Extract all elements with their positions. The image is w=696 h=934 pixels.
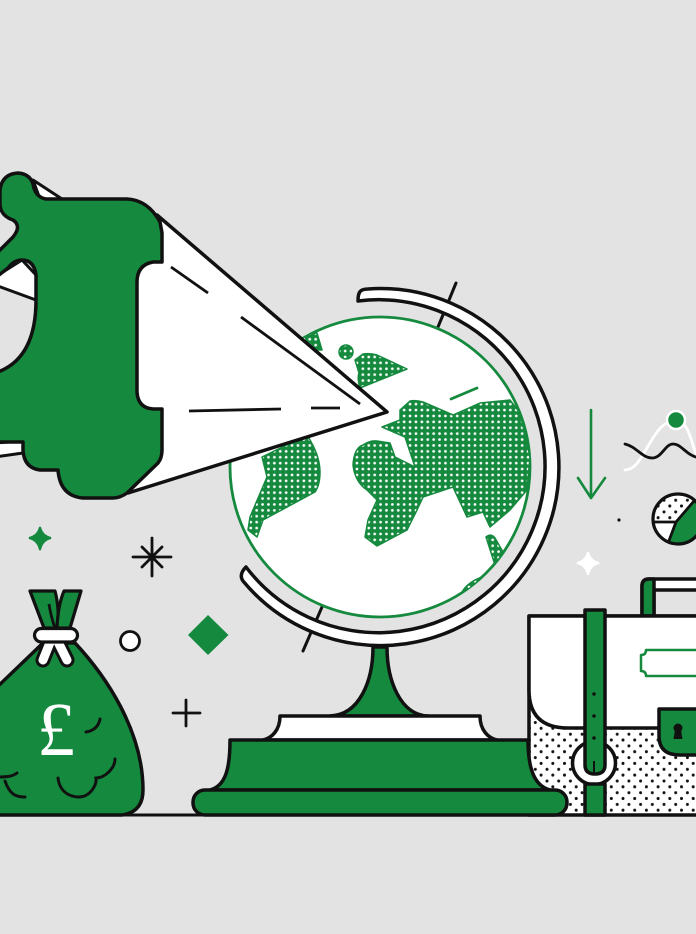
continent: left	[248, 435, 320, 537]
black wave	[625, 444, 696, 458]
green diamond	[188, 615, 228, 655]
tie band	[34, 628, 78, 642]
briefcase flap	[529, 616, 696, 728]
globe	[230, 283, 559, 651]
bag fold	[49, 604, 55, 628]
stand base	[193, 790, 567, 815]
stand plate	[263, 716, 497, 740]
bag creases	[0, 719, 115, 797]
briefcase handle	[642, 579, 696, 616]
down arrow	[578, 410, 605, 498]
pencil body	[0, 173, 162, 498]
continent: upper	[355, 354, 407, 388]
tie legs	[43, 640, 67, 660]
line chart	[625, 411, 696, 470]
strap holes	[592, 692, 596, 774]
strap lower	[585, 784, 605, 815]
pie chart	[650, 494, 696, 550]
continent: small east	[486, 535, 503, 565]
back wedge top	[33, 180, 62, 199]
green dash on sphere	[451, 388, 477, 399]
sparkle: white	[577, 552, 599, 575]
bag body	[0, 643, 143, 815]
pound sign: £	[37, 688, 75, 772]
pencil dashes	[171, 267, 360, 411]
globe ring	[241, 289, 559, 646]
money bag	[0, 591, 143, 815]
continent: top small	[300, 333, 322, 350]
pencil	[0, 173, 387, 498]
continent: main	[353, 400, 530, 546]
green dot	[667, 411, 685, 429]
ground line	[0, 814, 696, 816]
back wedge bottom	[0, 441, 23, 457]
asterisk	[133, 538, 171, 576]
stand tier	[210, 740, 550, 790]
globe axis	[303, 283, 456, 651]
white curve	[625, 420, 696, 470]
illustration: globe, pencil, money bag and briefcase	[0, 171, 696, 817]
globe sphere	[230, 317, 530, 617]
bag ear left	[30, 591, 58, 628]
strap upper	[585, 610, 605, 774]
bag ear right	[57, 591, 81, 628]
island	[339, 345, 353, 359]
back wedge left	[0, 260, 36, 300]
briefcase	[529, 579, 696, 815]
small circle	[120, 632, 140, 650]
pencil cone	[100, 215, 387, 493]
continents	[248, 333, 530, 592]
label plate	[641, 650, 696, 676]
sparkle: green	[29, 527, 51, 550]
buckle ring	[572, 742, 616, 784]
pie outline	[653, 494, 696, 544]
briefcase body	[529, 616, 696, 815]
clasp with keyhole	[659, 709, 696, 755]
stand neck	[330, 647, 428, 716]
plus sign	[173, 700, 200, 726]
globe stand	[193, 647, 567, 815]
continent: south edge	[462, 577, 482, 592]
pie segments	[654, 500, 696, 542]
tiny dot	[617, 518, 621, 522]
